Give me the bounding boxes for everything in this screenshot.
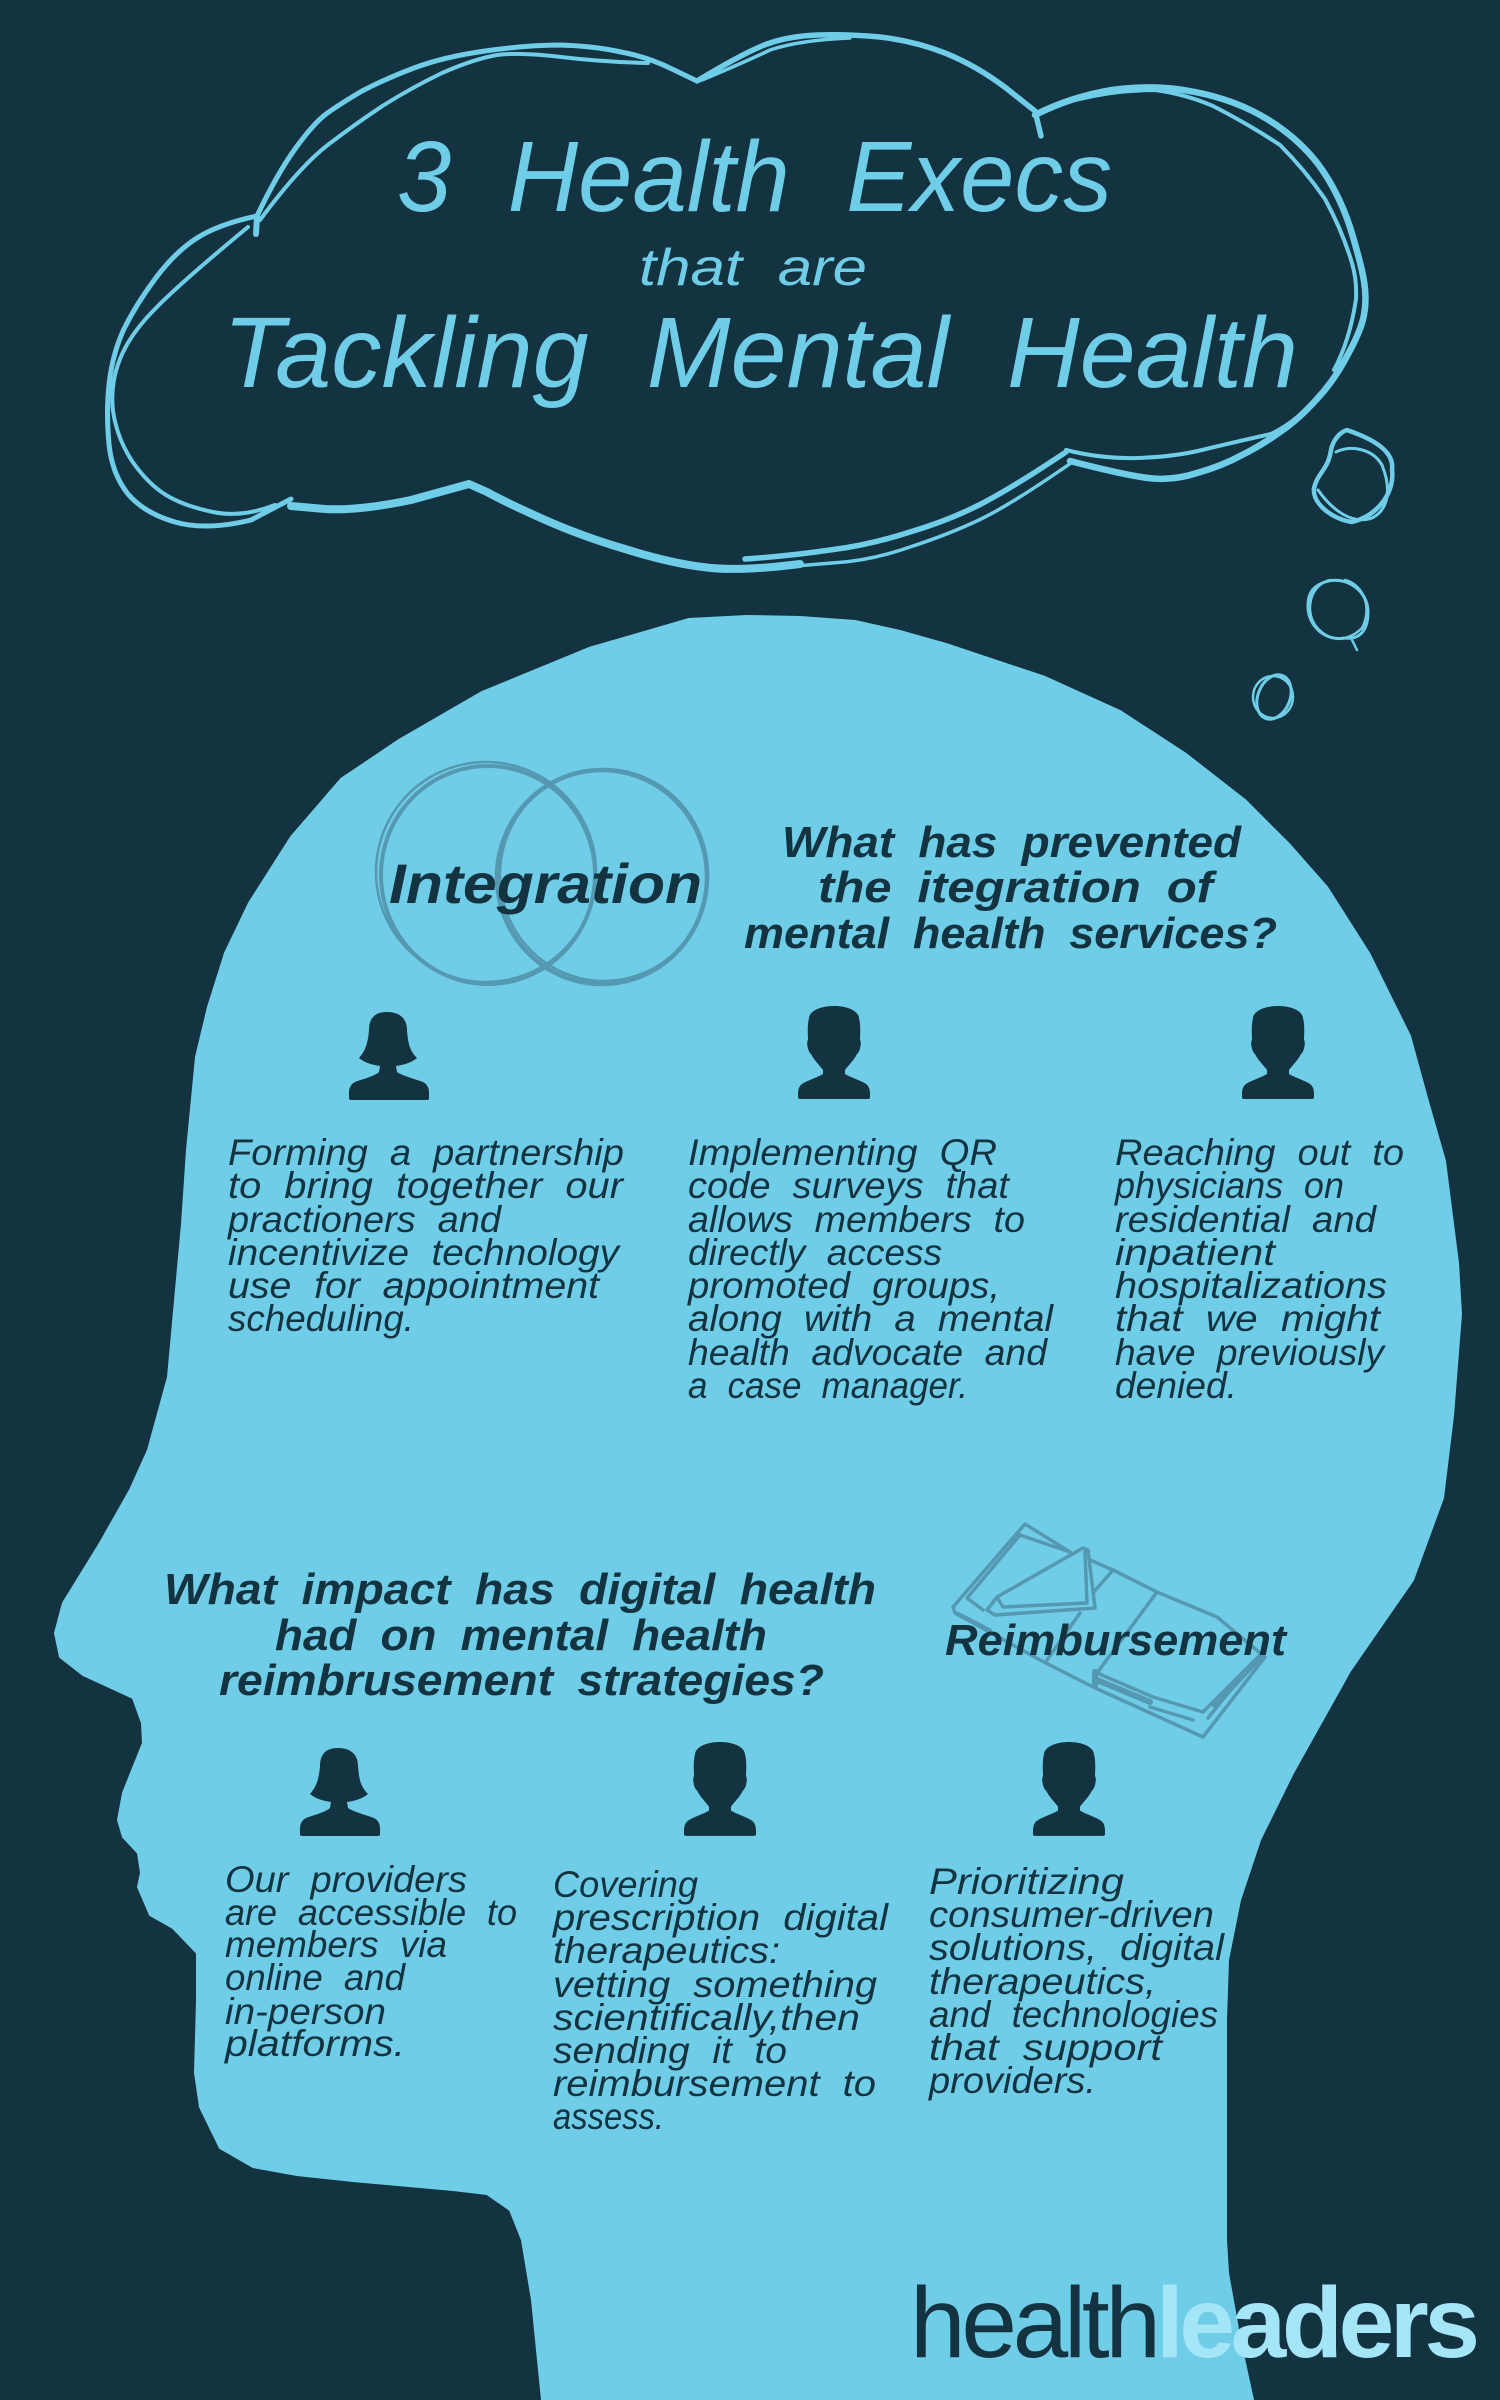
heading: reimbursement question: had on mental health [275,1611,767,1660]
text: reimbursement answer 2: sending it to [553,2030,787,2071]
heading: reimbursement question [164,1565,876,1705]
icon: man exec 6 [1033,1742,1105,1836]
text: reimbursement answer 1: Our providers [225,1859,467,1900]
text: integration answer 2: directly access [688,1232,942,1273]
title: Tackling Mental Health [223,297,1298,409]
text: integration answer 2: a case manager. [688,1365,968,1406]
text: integration answer 3: residential and [1115,1199,1377,1240]
text: reimbursement answer 1 [224,1859,517,2064]
icon: overlapping circles [376,762,708,984]
heading: integration question: mental health services? [744,909,1277,958]
text: integration answer 3 [1114,1132,1404,1406]
text: integration answer 3: physicians on [1114,1165,1344,1206]
text: integration answer 3: hospitalizations [1115,1265,1387,1306]
heading: reimbursement question: What impact has digital health [164,1565,876,1614]
text: reimbursement answer 3: providers. [928,2060,1096,2101]
text: reimbursement answer 3: and technologies [929,1994,1218,2035]
text: reimbursement answer 2 [552,1864,890,2137]
text: reimbursement answer 2: vetting something [553,1964,877,2005]
text: integration answer 2: along with a mental [688,1298,1055,1339]
thought bubbles [1251,430,1392,724]
heading: integration question: What has prevented [782,818,1242,867]
text: integration answer 3: that we might [1115,1298,1382,1339]
text: reimbursement answer 3: Prioritizing [929,1861,1124,1902]
label: Reimbursement: Reimbursement [945,1616,1288,1665]
text: integration answer 1: Forming a partnership [228,1132,624,1173]
title: that are [639,239,867,297]
text: integration answer 2: allows members to [688,1199,1025,1240]
text: reimbursement answer 1: members via [225,1924,447,1965]
text: integration answer 2 [687,1132,1055,1406]
text: integration answer 2: Implementing QR [688,1132,997,1173]
text: reimbursement answer 2: assess. [553,2096,664,2137]
text: integration answer 1: practioners and [227,1199,502,1240]
text: integration answer 3: denied. [1115,1365,1237,1406]
text: reimbursement answer 3: therapeutics, [929,1961,1156,2002]
logo: healthleaders: leaders [1156,2267,1480,2379]
text: reimbursement answer 2: reimbursement to [553,2063,876,2104]
heading: reimbursement question: reimbrusement strategies? [219,1656,824,1705]
heading: integration question [744,818,1277,958]
text: integration answer 3: have previously [1115,1332,1387,1373]
heading: integration question: the itegration of [818,863,1218,912]
text: reimbursement answer 2: Covering [553,1864,698,1905]
text: reimbursement answer 1: are accessible to [225,1892,517,1933]
text: reimbursement answer 2: scientifically,then [553,1997,860,2038]
text: integration answer 3: Reaching out to [1115,1132,1404,1173]
text: integration answer 1: incentivize technology [228,1232,622,1273]
text: reimbursement answer 1: online and [225,1957,406,1998]
text: reimbursement answer 3: solutions, digital [929,1927,1226,1968]
label: Integration: Integration [389,852,702,915]
text: integration answer 1 [227,1132,625,1339]
icon: money stack [953,1524,1265,1737]
logo: healthleaders [910,2267,1480,2379]
icon: woman exec 4 [300,1748,380,1836]
title: 3 Health Execs [397,121,1112,233]
icon: man exec 3 [1242,1006,1314,1099]
text: reimbursement answer 3 [928,1861,1226,2101]
text: reimbursement answer 3: consumer-driven [929,1894,1214,1935]
text: reimbursement answer 1: in-person [225,1991,386,2032]
title [223,121,1298,409]
icon: man exec 5 [684,1742,756,1836]
thought cloud [108,35,1366,570]
text: integration answer 2: promoted groups, [687,1265,1000,1306]
logo: healthleaders: health [910,2267,1161,2379]
text: reimbursement answer 1: platforms. [224,2023,405,2064]
text: reimbursement answer 2: therapeutics: [553,1930,780,1971]
text: integration answer 1: scheduling. [228,1298,414,1339]
text: integration answer 2: health advocate and [688,1332,1048,1373]
head silhouette [55,616,1461,2400]
text: integration answer 2: code surveys that [688,1165,1011,1206]
text: reimbursement answer 2: prescription digital [552,1897,890,1938]
text: reimbursement answer 3: that support [929,2027,1164,2068]
text: integration answer 1: use for appointment [228,1265,601,1306]
icon: man exec 2 [798,1006,870,1099]
icon: woman exec 1 [349,1012,429,1100]
text: integration answer 3: inpatient [1115,1232,1277,1273]
text: integration answer 1: to bring together our [228,1165,625,1206]
